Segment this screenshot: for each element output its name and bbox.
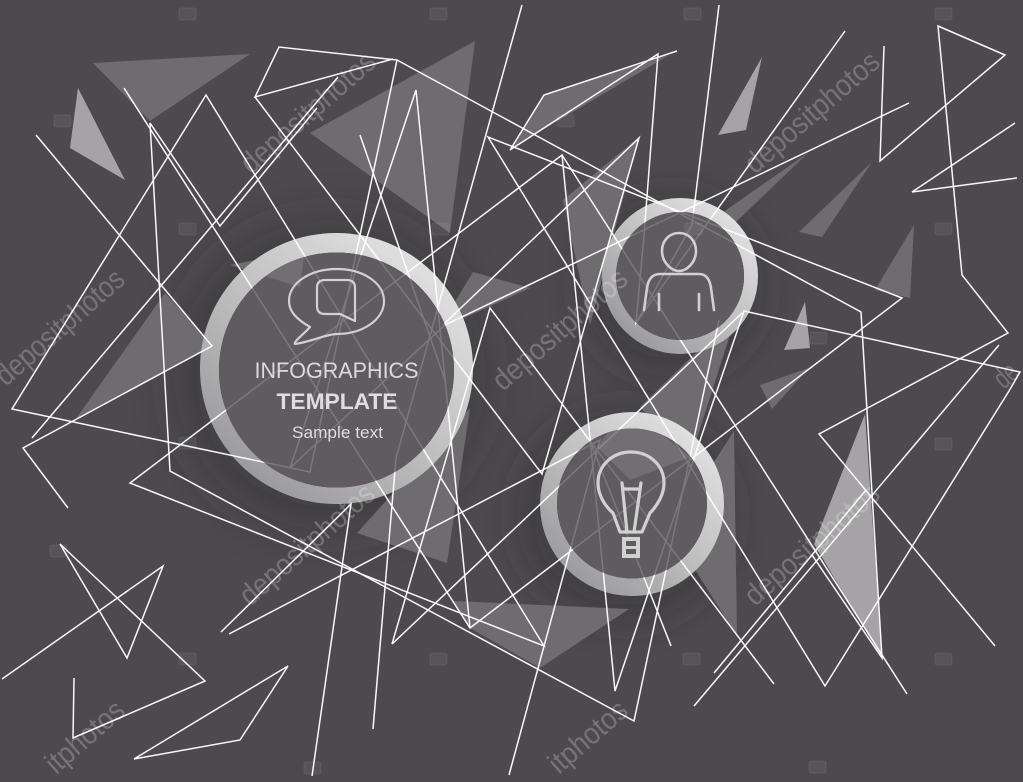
ring: main circle [200,233,473,504]
ring: bulb circle [540,412,724,596]
icon: speech bubble [289,269,384,344]
watermarks: depositphotos [234,45,382,180]
watermarks: depositphotos [486,262,634,397]
watermarks: itphotos [39,694,132,780]
watermarks: depositphotos [738,45,886,180]
watermarks: depositphotos [738,477,886,612]
person disc [616,212,744,340]
translucent triangles [75,41,914,668]
ring: person circle [602,198,758,354]
icon: person [644,233,714,310]
heading: INFOGRAPHICS: INFOGRAPHICS [254,358,418,383]
heading: TEMPLATE: TEMPLATE [276,389,398,414]
main disc [219,252,454,488]
watermarks: itphotos [542,694,635,780]
light triangles [70,57,882,658]
disc highlights [230,250,690,480]
bulb disc [557,428,707,578]
watermarks: depositphotos [233,477,381,612]
disc bases [219,212,744,578]
soft shadows [174,193,764,623]
icon: light bulb [598,452,664,558]
text: sample text: Sample text [292,423,383,442]
